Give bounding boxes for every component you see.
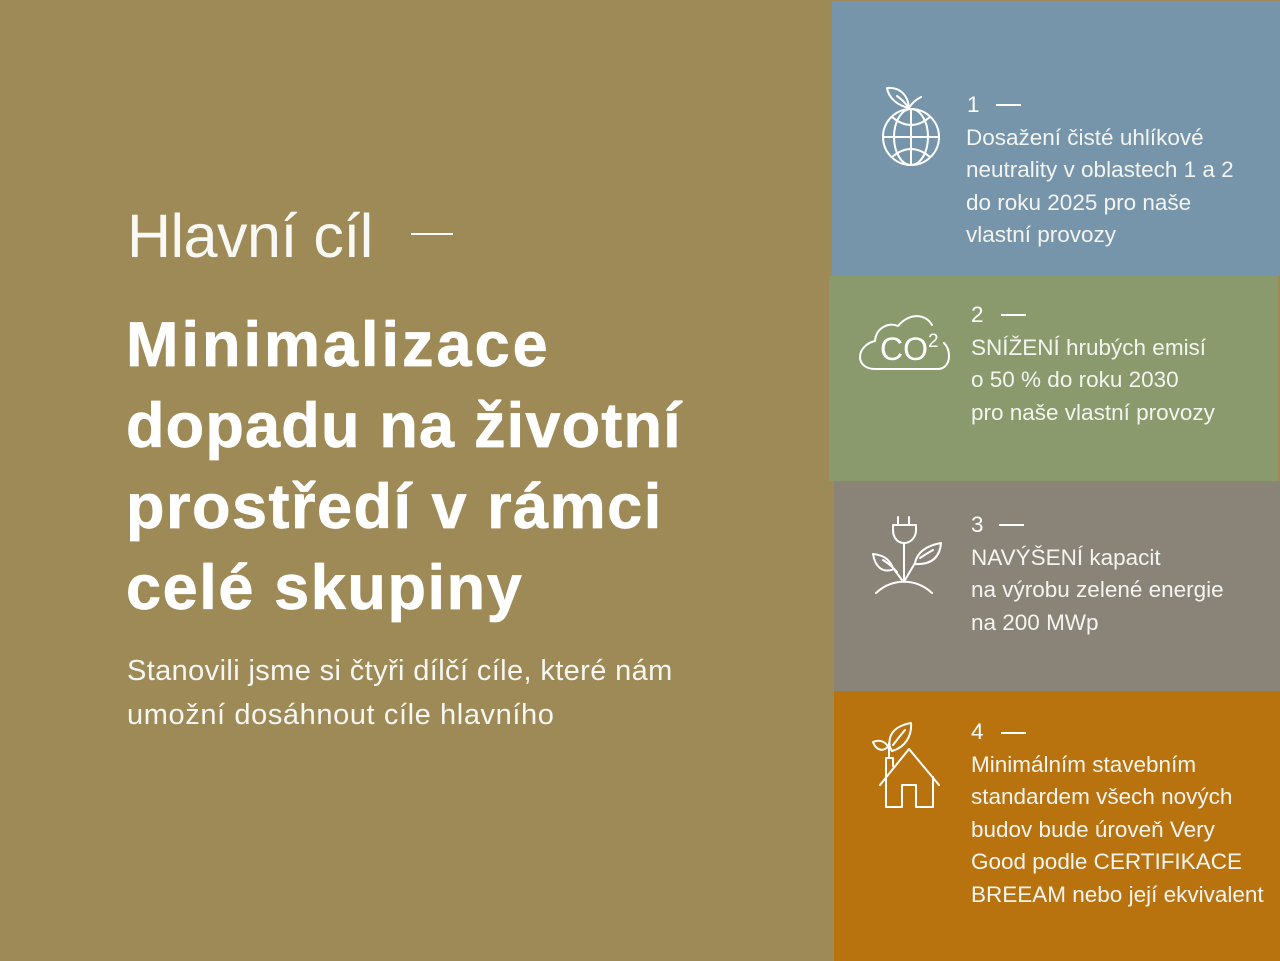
goal 3 number: 3 [971, 512, 984, 537]
dash 1 [996, 104, 1021, 106]
main title: celé skupiny [126, 553, 523, 623]
panel: goal 1 [832, 1, 1280, 276]
goal 4 text: standardem všech nových [971, 784, 1232, 809]
icon: plant with plug [872, 516, 942, 594]
intro text: umožní dosáhnout cíle hlavního [127, 698, 554, 730]
icon: globe apple [882, 86, 940, 166]
goal 2 text: o 50 % do roku 2030 [971, 367, 1179, 392]
goal 4 text: Good podle CERTIFIKACE [971, 849, 1242, 874]
goal 2 text: pro naše vlastní provozy [971, 400, 1215, 425]
goal 1 number: 1 [967, 92, 980, 117]
goal 3 text [971, 545, 1224, 635]
goal 3 text: na výrobu zelené energie [971, 577, 1224, 602]
icon: house with sprout [872, 722, 940, 808]
goal 2 number: 2 [971, 302, 984, 327]
goal 4 text: BREEAM nebo její ekvivalent [971, 882, 1264, 907]
main title: prostředí v rámci [126, 472, 663, 542]
panel: main goal [0, 0, 834, 961]
goal 2 text [971, 335, 1215, 425]
panel: goal 4 [834, 691, 1280, 961]
goal 2 text: SNÍŽENÍ hrubých emisí [971, 335, 1206, 360]
icon: CO2 cloud [859, 315, 950, 370]
heading dash [411, 233, 453, 234]
panel: goal 2 [829, 276, 1278, 481]
icon: CO2 cloud: CO [880, 331, 928, 367]
intro text [127, 655, 673, 730]
goal 1 text: neutrality v oblastech 1 a 2 [966, 157, 1234, 182]
panel: goal 3 [834, 481, 1280, 691]
intro text: Stanovili jsme si čtyři dílčí cíle, které nám [127, 655, 673, 687]
goal 4 number: 4 [971, 719, 984, 744]
main title [126, 310, 683, 623]
icon: CO2 cloud: 2 [928, 331, 939, 352]
goal 4 text [971, 752, 1264, 907]
goal 3 text: na 200 MWp [971, 610, 1099, 635]
goal 4 text: Minimálním stavebním [971, 752, 1196, 777]
main title: Minimalizace [126, 310, 551, 380]
dash 3 [999, 524, 1024, 526]
goal 4 text: budov bude úroveň Very [971, 817, 1215, 842]
goal 1 text [966, 125, 1234, 247]
goal 1 text: Dosažení čisté uhlíkové [966, 125, 1204, 150]
dash 4 [1001, 732, 1026, 734]
main title: dopadu na životní [126, 391, 682, 461]
dash 2 [1001, 314, 1026, 316]
eyebrow heading: Hlavní cíl [127, 202, 373, 270]
goal 3 text: NAVÝŠENÍ kapacit [971, 545, 1161, 570]
goal 1 text: vlastní provozy [966, 222, 1116, 247]
goal 1 text: do roku 2025 pro naše [966, 190, 1191, 215]
